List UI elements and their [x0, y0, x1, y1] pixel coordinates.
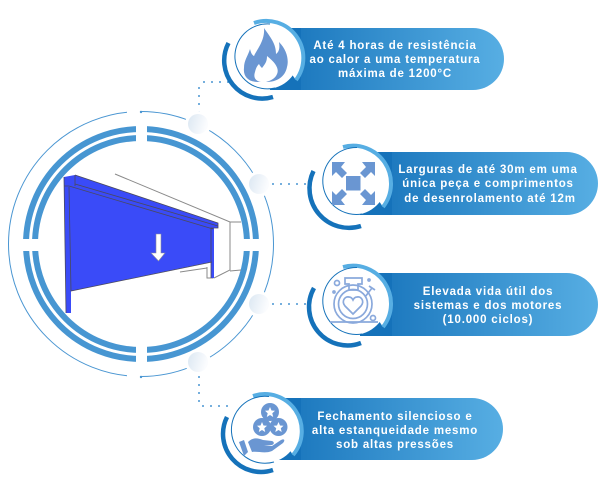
text: fire resistance: máxima de 1200°C — [338, 68, 452, 80]
text: service life: Elevada vida útil dos — [423, 286, 553, 298]
text: fire resistance: ao calor a uma temperatura — [310, 54, 480, 66]
text: service life: (10.000 ciclos) — [443, 314, 533, 326]
text: service life: sistemas e dos motores — [414, 300, 562, 312]
text: widths: única peça e comprimentos — [402, 178, 574, 190]
text: silent closing: alta estanqueidade mesmo — [312, 425, 478, 437]
icon: expand arrows — [332, 162, 375, 205]
icon: flame — [244, 28, 288, 82]
text: widths: Larguras de até 30m em uma — [398, 164, 578, 176]
text: widths: de desenrolamento até 12m — [404, 193, 576, 205]
connector dots and nodes — [185, 81, 306, 407]
panel: fire resistance — [224, 21, 504, 99]
arrow on door — [151, 234, 165, 261]
panel: service life — [309, 266, 598, 345]
door illustration — [64, 174, 241, 313]
icon: stopwatch with heart — [330, 278, 378, 323]
panel: silent closing — [223, 394, 503, 472]
panel: widths — [309, 146, 598, 228]
central ring diagram — [8, 108, 274, 380]
text: fire resistance: Até 4 horas de resistência — [313, 40, 477, 52]
text: silent closing: Fechamento silencioso e — [317, 411, 473, 423]
icon: hand with star coins — [239, 403, 288, 456]
text: silent closing: sob altas pressões — [336, 439, 454, 451]
